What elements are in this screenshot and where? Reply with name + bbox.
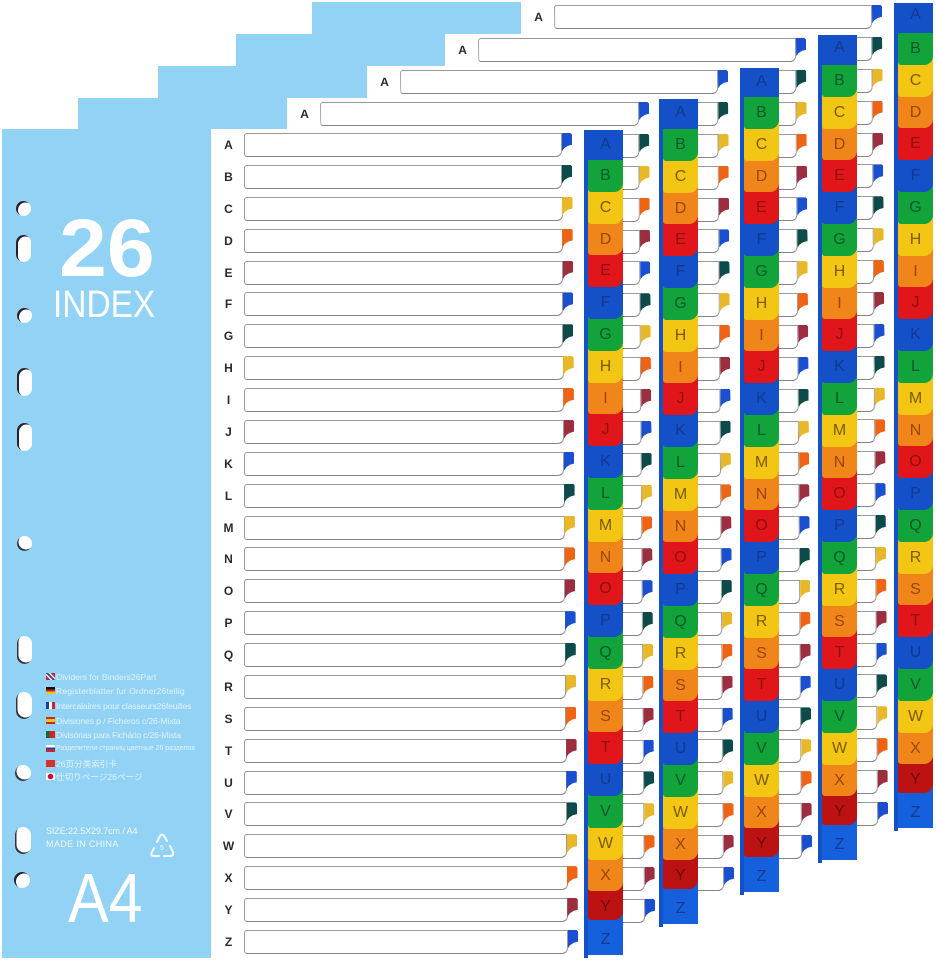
colour tab strip A-Z, sheet 2: K xyxy=(675,422,686,439)
colour tab strip A-Z, sheet 3: K xyxy=(756,390,767,407)
colour tab strip A-Z, sheet 5: P xyxy=(910,485,921,502)
multilingual product lines with flags: Dividers for Binders26Part xyxy=(56,672,156,682)
colour tab strip A-Z, front sheet: X xyxy=(600,867,611,884)
sheet 1 (front divider) xyxy=(2,129,623,958)
row S: S xyxy=(224,712,232,726)
row O xyxy=(224,579,575,603)
colour tab strip A-Z, sheet 5: J xyxy=(912,294,920,311)
size text: SIZE:22.5X29.7cm / A4 xyxy=(46,826,137,836)
colour tab strip A-Z, front sheet xyxy=(584,130,623,955)
colour tab strip A-Z, sheet 5: U xyxy=(910,644,921,661)
index rows, sheet 2: A xyxy=(300,107,309,121)
colour tab strip A-Z, front sheet: J xyxy=(602,421,610,438)
sheet 4 xyxy=(236,34,857,863)
row C: C xyxy=(224,202,233,216)
row L xyxy=(225,484,575,508)
white index area, sheet 3 xyxy=(367,66,779,896)
colour tab strip A-Z, front sheet: B xyxy=(600,167,611,184)
colour tab strip A-Z, sheet 5: W xyxy=(908,708,923,725)
row W xyxy=(222,834,577,858)
row Q: Q xyxy=(224,648,233,662)
colour tab strip A-Z, sheet 3: L xyxy=(757,422,766,439)
colour tab strip A-Z, front sheet: T xyxy=(601,739,610,756)
colour tab strip A-Z, sheet 3: J xyxy=(758,358,766,375)
row R: R xyxy=(224,680,233,694)
colour tab strip A-Z, sheet 3: O xyxy=(755,517,768,534)
colour tab strip A-Z, sheet 4: Z xyxy=(835,836,844,853)
colour tab strip A-Z, sheet 2: Q xyxy=(674,613,687,630)
colour tab strip A-Z, front sheet: D xyxy=(600,231,611,248)
colour tab strip A-Z, sheet 3: H xyxy=(756,295,767,312)
row I: I xyxy=(227,393,230,407)
colour tab strip A-Z, sheet 4: L xyxy=(835,390,844,407)
row W: W xyxy=(223,839,234,853)
colour tab strip A-Z, sheet 4: C xyxy=(834,104,845,121)
row J: J xyxy=(225,425,232,439)
row Y xyxy=(224,898,578,922)
colour tab strip A-Z, front sheet: V xyxy=(600,803,611,820)
index rows, sheet 3: A xyxy=(380,75,389,89)
blue header band, sheet 4 xyxy=(236,34,445,74)
multilingual product lines with flags: Intercalaires pour classeurs26feuilles xyxy=(56,700,191,710)
multilingual product lines with flags: Divisiones p / Ficheros c/26-Mixta xyxy=(56,716,180,726)
row C xyxy=(224,197,572,221)
colour tab strip A-Z, front sheet: I xyxy=(603,390,608,407)
multilingual product lines with flags: 26页分类索引卡 xyxy=(56,758,117,768)
colour tab strip A-Z, sheet 2: J xyxy=(676,390,684,407)
row B: B xyxy=(224,170,233,184)
colour tab strip A-Z, sheet 4: W xyxy=(832,740,847,757)
colour tab strip A-Z, sheet 4: U xyxy=(834,676,845,693)
colour tab strip A-Z, front sheet: L xyxy=(601,485,610,502)
colour tab strip A-Z, front sheet: Z xyxy=(601,931,610,948)
sheet 5 (backmost divider) xyxy=(312,2,933,831)
row V: V xyxy=(224,807,232,821)
colour tab strip A-Z, sheet 3 xyxy=(740,68,779,892)
colour tab strip A-Z, sheet 2: S xyxy=(675,677,686,694)
row M xyxy=(224,516,575,540)
colour tab strip A-Z, sheet 3: Q xyxy=(755,581,768,598)
colour tab strip A-Z, sheet 5: Q xyxy=(909,517,922,534)
INDEX label: INDEX xyxy=(53,284,155,326)
white index area, sheet 5 xyxy=(521,2,933,832)
row I xyxy=(227,388,574,412)
colour tab strip A-Z, sheet 5: C xyxy=(910,72,921,89)
colour tab strip A-Z, front sheet: O xyxy=(599,580,612,597)
colour tab strip A-Z, front sheet: R xyxy=(600,676,611,693)
colour tab strip A-Z, sheet 3: C xyxy=(756,136,767,153)
colour tab strip A-Z, sheet 5: L xyxy=(911,358,920,375)
colour tab strip A-Z, sheet 2: O xyxy=(674,549,687,566)
colour tab strip A-Z, sheet 4: G xyxy=(833,231,846,248)
colour tab strip A-Z, sheet 3: S xyxy=(756,645,767,662)
multilingual product lines with flags: Registerblatter fur Ordner26teilig xyxy=(56,686,185,696)
colour tab strip A-Z, sheet 4: E xyxy=(834,167,845,184)
big number 26: 26 xyxy=(59,203,155,294)
colour tab strip A-Z, sheet 4: I xyxy=(837,295,842,312)
colour tab strip A-Z, sheet 4: N xyxy=(834,454,845,471)
multilingual product lines with flags: 仕切りページ26ページ xyxy=(56,772,143,782)
colour tab strip A-Z, sheet 5: V xyxy=(910,676,921,693)
colour tab strip A-Z, sheet 3: E xyxy=(756,199,767,216)
colour tab strip A-Z, sheet 3: W xyxy=(754,772,769,789)
colour tab strip A-Z, front sheet: F xyxy=(601,294,610,311)
colour tab strip A-Z, sheet 3: M xyxy=(755,454,768,471)
row F: F xyxy=(225,297,232,311)
colour tab strip A-Z, sheet 4: S xyxy=(834,613,845,630)
multilingual product lines with flags: Разделители страниц цветные 26 разделов xyxy=(56,744,195,752)
colour tab strip A-Z, sheet 3: N xyxy=(756,486,767,503)
row V xyxy=(224,802,577,826)
colour tab strip A-Z, front sheet: E xyxy=(600,262,611,279)
index rows, sheet 5 xyxy=(534,5,888,826)
colour tab strip A-Z, sheet 4: Y xyxy=(834,803,845,820)
colour tab strip A-Z, sheet 4: B xyxy=(834,72,845,89)
colour tab strip A-Z, sheet 4: J xyxy=(836,326,844,343)
colour tab strip A-Z, sheet 3: V xyxy=(756,740,767,757)
colour tab strip A-Z, front sheet: N xyxy=(600,549,611,566)
row Z xyxy=(225,930,578,954)
colour tab strip A-Z, sheet 4: O xyxy=(833,485,846,502)
colour tab strip A-Z, front sheet: S xyxy=(600,708,611,725)
colour tab strip A-Z, sheet 2: L xyxy=(676,454,685,471)
row M: M xyxy=(224,520,234,534)
row K xyxy=(224,452,574,476)
colour tab strip A-Z, sheet 3: B xyxy=(756,104,767,121)
colour tab strip A-Z, sheet 5: Z xyxy=(911,804,920,821)
row A xyxy=(224,133,572,157)
colour tab strip A-Z, sheet 2: C xyxy=(675,168,686,185)
blue cover panel with holes and print xyxy=(2,129,211,958)
multilingual product lines with flags: Divisórias para Fichário c/26-Mista xyxy=(56,730,181,740)
row H: H xyxy=(224,361,233,375)
row Z: Z xyxy=(225,935,232,949)
colour tab strip A-Z, sheet 2: B xyxy=(675,136,686,153)
made in china text: MADE IN CHINA xyxy=(46,839,119,849)
colour tab strip A-Z, sheet 2: E xyxy=(675,231,686,248)
colour tab strip A-Z, sheet 2: F xyxy=(676,263,685,280)
colour tab strip A-Z, sheet 4: H xyxy=(834,263,845,280)
blue header band, sheet 3 xyxy=(158,66,367,106)
row S xyxy=(224,707,576,731)
row J xyxy=(225,420,574,444)
colour tab strip A-Z, sheet 5: D xyxy=(910,104,921,121)
colour tab strip A-Z, front sheet: U xyxy=(600,771,611,788)
row X: X xyxy=(224,871,232,885)
row G: G xyxy=(224,329,233,343)
colour tab strip A-Z, sheet 3: I xyxy=(759,327,764,344)
row G xyxy=(224,324,573,348)
colour tab strip A-Z, sheet 5: H xyxy=(910,231,921,248)
row E: E xyxy=(224,266,232,280)
colour tab strip A-Z, sheet 2: N xyxy=(675,518,686,535)
colour tab strip A-Z, sheet 2: U xyxy=(675,740,686,757)
colour tab strip A-Z, sheet 2: T xyxy=(676,708,685,725)
row Q xyxy=(224,643,576,667)
white index area, front sheet xyxy=(211,129,623,958)
colour tab strip A-Z, sheet 2: V xyxy=(675,772,686,789)
index rows, sheet 5: A xyxy=(534,10,543,24)
sheet 2 xyxy=(78,98,698,927)
white index area, sheet 2 xyxy=(287,98,698,928)
row P: P xyxy=(224,616,232,630)
row D xyxy=(224,229,573,253)
colour tab strip A-Z, sheet 5: X xyxy=(910,740,921,757)
colour tab strip A-Z, sheet 5 xyxy=(894,3,933,828)
row D: D xyxy=(224,234,233,248)
colour tab strip A-Z, sheet 3: D xyxy=(756,168,767,185)
colour tab strip A-Z, sheet 5: A xyxy=(910,6,921,23)
colour tab strip A-Z, sheet 5: N xyxy=(910,422,921,439)
row Y: Y xyxy=(224,903,232,917)
colour tab strip A-Z, sheet 2: Y xyxy=(675,867,686,884)
multilingual product lines with flags xyxy=(46,672,195,782)
colour tab strip A-Z, sheet 3: T xyxy=(757,676,766,693)
colour tab strip A-Z, sheet 5: I xyxy=(913,263,918,280)
colour tab strip A-Z, sheet 2: D xyxy=(675,200,686,217)
A4 large label: A4 xyxy=(68,859,142,937)
colour tab strip A-Z, front sheet: W xyxy=(598,835,613,852)
icon: recycling triangle: 5 xyxy=(160,845,164,852)
colour tab strip A-Z, sheet 3: X xyxy=(756,804,767,821)
colour tab strip A-Z, sheet 5: O xyxy=(909,453,922,470)
colour tab strip A-Z, sheet 4: R xyxy=(834,581,845,598)
colour tab strip A-Z, sheet 4: K xyxy=(834,358,845,375)
colour tab strip A-Z, front sheet: G xyxy=(599,326,612,343)
row X xyxy=(224,866,578,890)
colour tab strip A-Z, sheet 2: M xyxy=(674,486,687,503)
colour tab strip A-Z, sheet 5: M xyxy=(909,390,922,407)
colour tab strip A-Z, front sheet: C xyxy=(600,199,611,216)
index rows, sheet 4: A xyxy=(458,43,467,57)
colour tab strip A-Z, sheet 4: D xyxy=(834,136,845,153)
row L: L xyxy=(225,489,232,503)
colour tab strip A-Z, sheet 4: A xyxy=(834,39,845,56)
colour tab strip A-Z, front sheet: M xyxy=(599,517,612,534)
row N: N xyxy=(224,552,233,566)
colour tab strip A-Z, front sheet: H xyxy=(600,358,611,375)
colour tab strip A-Z, front sheet: Y xyxy=(600,898,611,915)
colour tab strip A-Z, sheet 2: I xyxy=(678,359,683,376)
colour tab strip A-Z, sheet 4: T xyxy=(835,644,844,661)
index rows, sheet 3 xyxy=(380,70,734,891)
colour tab strip A-Z, sheet 5: F xyxy=(911,167,920,184)
index rows, front sheet xyxy=(222,133,578,954)
icon: recycling triangle xyxy=(150,834,174,857)
colour tab strip A-Z, front sheet: P xyxy=(600,612,611,629)
index rows, sheet 4 xyxy=(458,38,812,859)
colour tab strip A-Z, sheet 4: X xyxy=(834,772,845,789)
row K: K xyxy=(224,457,233,471)
colour tab strip A-Z, sheet 3: G xyxy=(755,263,768,280)
colour tab strip A-Z, sheet 3: P xyxy=(756,549,767,566)
row U xyxy=(224,771,577,795)
row N xyxy=(224,547,575,571)
colour tab strip A-Z, sheet 3: A xyxy=(756,73,767,90)
colour tab strip A-Z, sheet 5: B xyxy=(910,40,921,57)
colour tab strip A-Z, sheet 2: P xyxy=(675,581,686,598)
colour tab strip A-Z, sheet 2: W xyxy=(673,804,688,821)
blue header band, sheet 5 xyxy=(312,2,521,42)
row P xyxy=(224,611,576,635)
colour tab strip A-Z, sheet 5: E xyxy=(910,135,921,152)
colour tab strip A-Z, sheet 3: R xyxy=(756,613,767,630)
colour tab strip A-Z, front sheet: A xyxy=(600,136,611,153)
punch holes xyxy=(14,201,32,888)
row U: U xyxy=(224,776,233,790)
colour tab strip A-Z, sheet 5: Y xyxy=(910,771,921,788)
row A: A xyxy=(224,138,233,152)
colour tab strip A-Z, sheet 3: F xyxy=(757,231,766,248)
colour tab strip A-Z, sheet 4: V xyxy=(834,708,845,725)
colour tab strip A-Z, sheet 3: U xyxy=(756,708,767,725)
colour tab strip A-Z, sheet 5: S xyxy=(910,581,921,598)
index rows, sheet 2 xyxy=(300,102,655,923)
colour tab strip A-Z, sheet 2: R xyxy=(675,645,686,662)
colour tab strip A-Z, front sheet: K xyxy=(600,453,611,470)
row H xyxy=(224,356,574,380)
row F xyxy=(225,292,573,316)
white index area, sheet 4 xyxy=(445,34,857,864)
row T xyxy=(225,739,577,763)
row R xyxy=(224,675,576,699)
sheet 3 xyxy=(158,66,779,895)
colour tab strip A-Z, front sheet: Q xyxy=(599,644,612,661)
row E xyxy=(224,261,573,285)
colour tab strip A-Z, sheet 4: P xyxy=(834,517,845,534)
colour tab strip A-Z, sheet 2: G xyxy=(674,295,687,312)
row O: O xyxy=(224,584,233,598)
colour tab strip A-Z, sheet 2: A xyxy=(675,104,686,121)
colour tab strip A-Z, sheet 2: Z xyxy=(676,900,685,917)
blue header band, sheet 2 xyxy=(78,98,287,138)
colour tab strip A-Z, sheet 3: Z xyxy=(757,868,766,885)
colour tab strip A-Z, sheet 5: T xyxy=(911,612,920,629)
colour tab strip A-Z, sheet 5: K xyxy=(910,326,921,343)
colour tab strip A-Z, sheet 5: G xyxy=(909,199,922,216)
colour tab strip A-Z, sheet 5: R xyxy=(910,549,921,566)
colour tab strip A-Z, sheet 2 xyxy=(659,99,698,924)
colour tab strip A-Z, sheet 2: X xyxy=(675,836,686,853)
colour tab strip A-Z, sheet 4: Q xyxy=(833,549,846,566)
colour tab strip A-Z, sheet 3: Y xyxy=(756,835,767,852)
row T: T xyxy=(225,744,232,758)
colour tab strip A-Z, sheet 4: F xyxy=(835,199,844,216)
colour tab strip A-Z, sheet 4 xyxy=(818,35,857,860)
colour tab strip A-Z, sheet 4: M xyxy=(833,422,846,439)
row B xyxy=(224,165,572,189)
colour tab strip A-Z, sheet 2: H xyxy=(675,327,686,344)
